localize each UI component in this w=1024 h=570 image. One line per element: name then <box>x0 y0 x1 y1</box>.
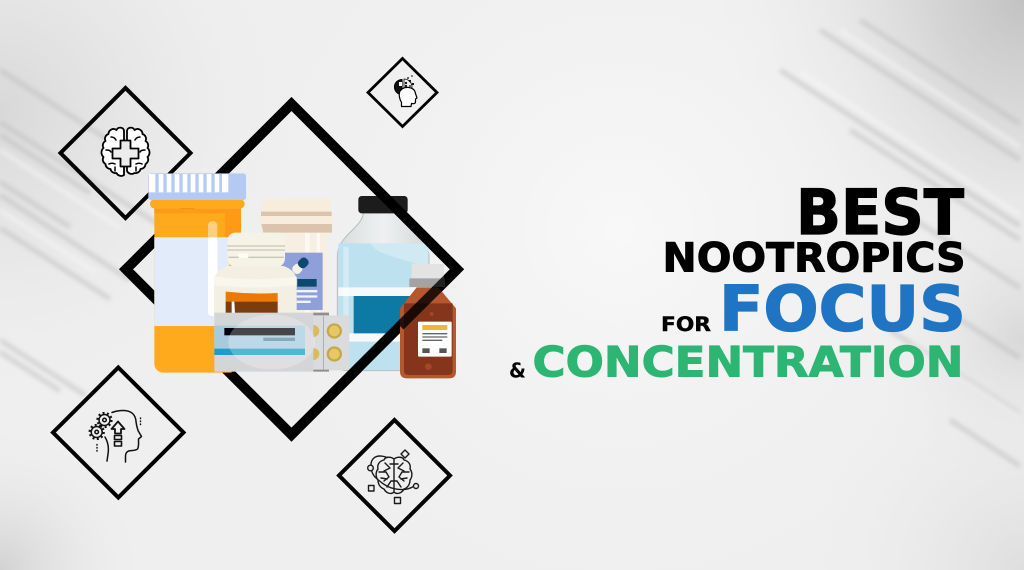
small diamond: brain in orbit <box>339 420 450 531</box>
heading word: FOCUS: FOCUS <box>719 272 966 346</box>
large black diamond frame <box>126 104 457 435</box>
small diamond: brain with medical cross <box>60 88 190 218</box>
orange pill bottle <box>148 173 246 373</box>
diamond edge over glass bottle <box>331 160 457 395</box>
icon: head with particles <box>395 75 417 106</box>
heading symbol: ampersand: & <box>509 358 526 382</box>
heading word: FOR: FOR <box>661 313 711 336</box>
icon: brain with medical cross <box>101 128 150 176</box>
blister pack with gold pills <box>307 313 349 372</box>
diamond edge over brown bottle <box>400 269 457 326</box>
heading word: NOOTROPICS: NOOTROPICS <box>662 234 966 282</box>
small diamond: head with gears and upward arrow <box>53 368 184 498</box>
medicine box <box>214 313 315 372</box>
cream jar with orange label <box>214 233 297 317</box>
medicine bottles group <box>148 173 429 373</box>
heading word: BEST: BEST <box>796 176 964 249</box>
cream supplement jar <box>260 199 333 315</box>
title block <box>509 176 966 386</box>
clear glass bottle with blue liquid <box>337 196 429 371</box>
icon: head with gears and arrow <box>90 410 142 462</box>
small diamond: head with focus particles <box>368 58 437 126</box>
icon: brain with orbit and stars <box>368 450 418 504</box>
heading word: CONCENTRATION: CONCENTRATION <box>532 338 964 386</box>
brown syrup bottle <box>400 264 456 378</box>
